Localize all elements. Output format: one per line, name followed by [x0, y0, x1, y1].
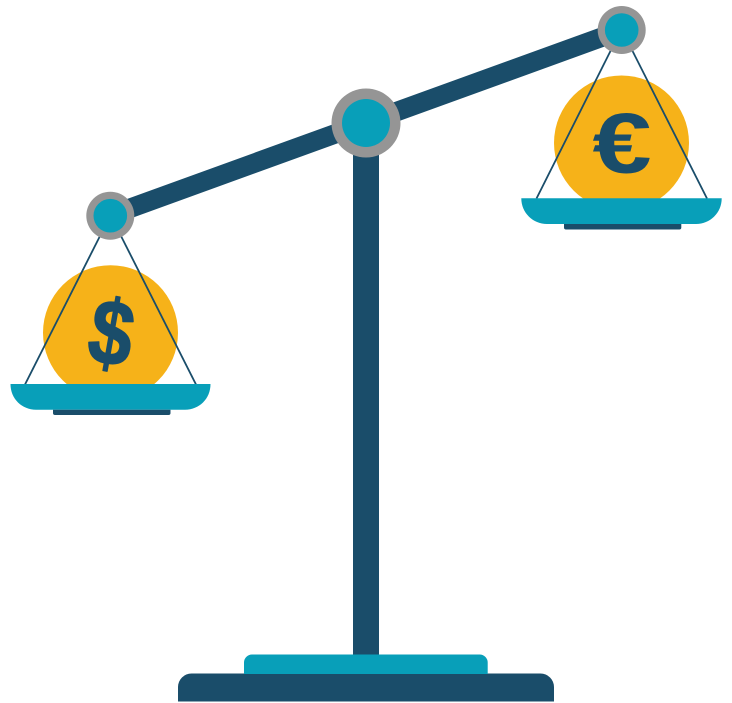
- central pivot: [332, 88, 400, 158]
- right pan with euro coin: [521, 6, 722, 230]
- tilted beam: [110, 30, 622, 216]
- euro coin: [554, 76, 689, 210]
- left pivot: [86, 192, 134, 240]
- central post: [353, 123, 379, 654]
- left pan dish: [10, 384, 210, 410]
- dollar coin: $: [81, 280, 142, 388]
- right hanging strings: [536, 50, 707, 198]
- right pan dish: [521, 198, 722, 224]
- right pivot: [598, 6, 646, 54]
- left hanging strings: [25, 236, 196, 384]
- dollar coin: [43, 265, 178, 400]
- euro coin: €: [592, 97, 652, 191]
- base of scale: [178, 654, 554, 702]
- left pan with dollar coin: [10, 192, 210, 415]
- left pan foot: [53, 410, 170, 415]
- right pan foot: [564, 224, 681, 230]
